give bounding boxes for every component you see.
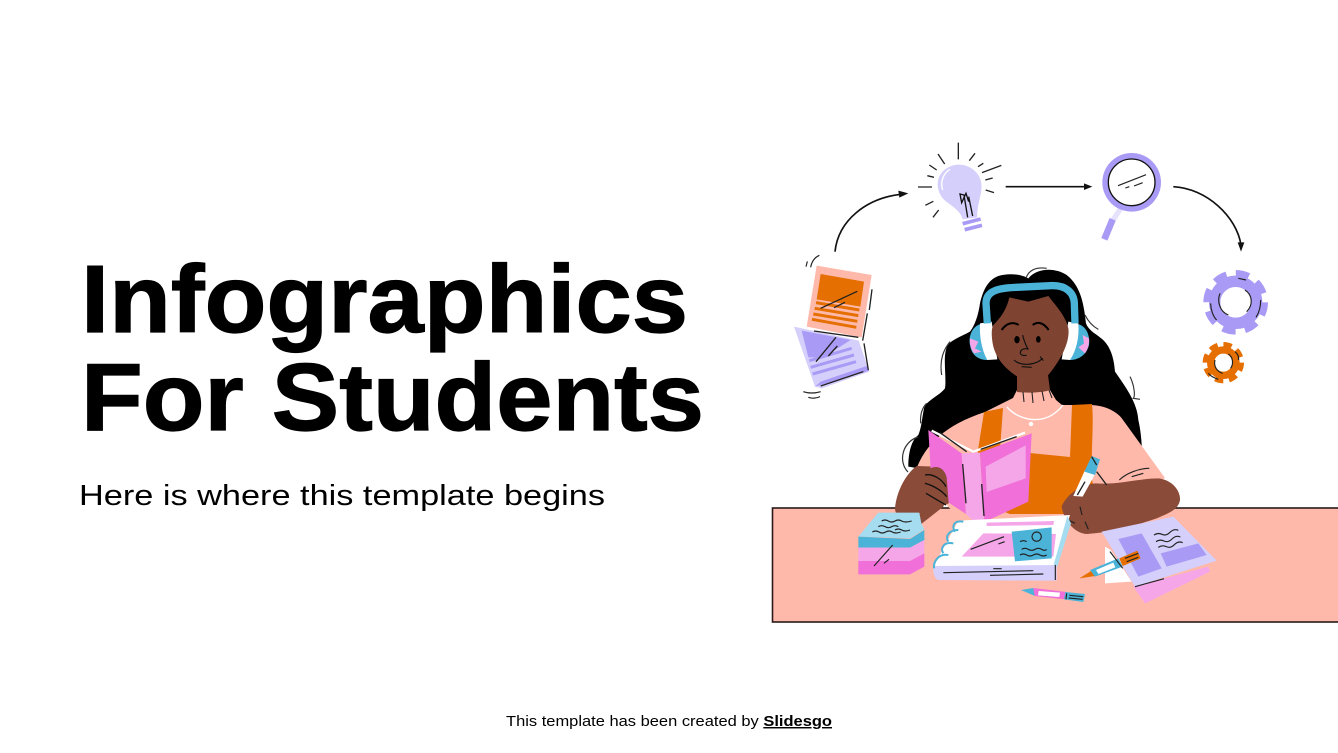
arrow: documents to bulb [835,191,908,252]
arrow: magnifier to gears [1173,187,1244,252]
left ear cup [970,322,997,360]
torso [916,390,1165,520]
pen with orange tip [1079,551,1141,578]
icon: magnifier [1102,153,1161,239]
panel: desk [772,508,1338,622]
dress [975,404,1100,514]
icon: large purple gear [1207,273,1265,331]
pen on the desk [1021,588,1085,602]
neck [1017,375,1050,393]
icon: orange document [803,255,872,398]
icon: light bulb [918,143,1001,230]
necklace [1007,405,1063,426]
icon: small orange gear [1205,345,1241,381]
arm crease and right hand lines [1067,468,1149,529]
face [992,296,1069,381]
writing pen [1073,456,1107,497]
footer credit: This template has been created by Slidesgo [506,714,832,730]
lower scene [858,430,1217,603]
left hand [925,467,949,505]
hair [908,268,1142,477]
title: Infographics [81,246,688,353]
right forearm [1062,478,1180,534]
title: For Students [81,344,704,451]
icon: lavender document [794,327,869,388]
open pink book [928,430,1032,524]
headphones and face [970,286,1089,381]
left forearm [895,466,950,525]
spiral notebook [933,515,1071,581]
title [81,246,704,451]
arrow: bulb to magnifier [1006,183,1092,190]
papers on the right [1102,517,1217,603]
right ear cup [1062,322,1089,360]
illustration: student [858,268,1217,603]
illustration: process icons [794,143,1265,398]
subtitle: Here is where this template begins [79,480,605,512]
sticky note stack [858,513,924,574]
headband [986,286,1075,323]
